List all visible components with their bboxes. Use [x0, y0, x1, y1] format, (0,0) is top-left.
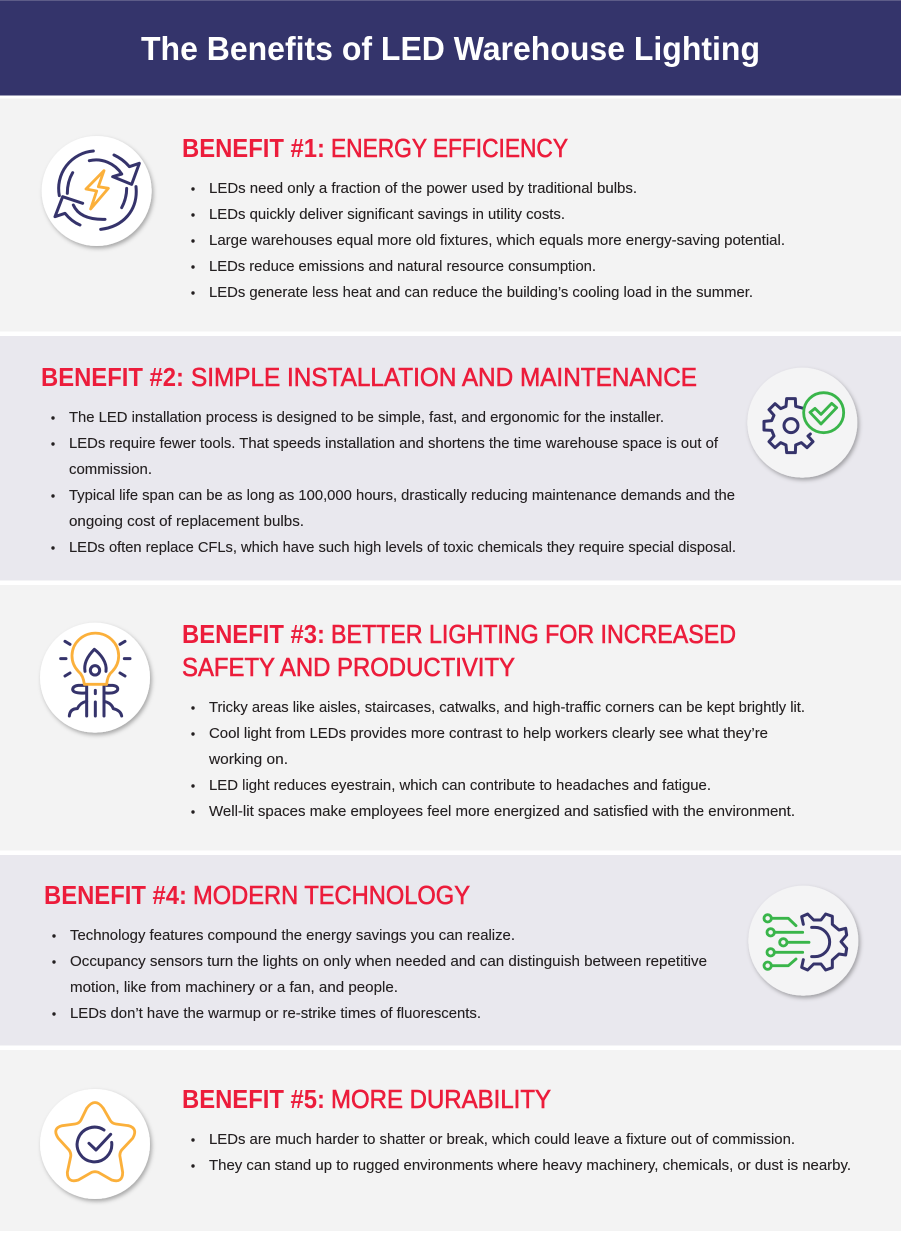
bullet list: benefit 3: LED light reduces eyestrain, which can contribute to headaches and fatigue.: [209, 778, 711, 794]
heading: benefit 3: [182, 619, 736, 682]
heading: benefit 5: MORE DURABILITY: [331, 1084, 551, 1114]
panel: benefit 1 energy efficiency: [0, 98, 901, 332]
bullet list: benefit 4: Occupancy sensors turn the lights on only when needed and can distinguish between repetitive: [70, 954, 707, 970]
icon: energy cycle with lightning bolt: [42, 136, 152, 246]
heading: benefit 5: [182, 1084, 551, 1114]
heading: benefit 3: SAFETY AND PRODUCTIVITY: [182, 652, 515, 682]
bullet list: benefit 1: LEDs reduce emissions and natural resource consumption.: [209, 259, 596, 275]
heading: benefit 4: [44, 880, 470, 910]
bullet list: benefit 3: [191, 700, 805, 820]
icon: light bulb with rocket: [40, 623, 150, 733]
bullet list: benefit 4: Technology features compound the energy savings you can realize.: [70, 928, 515, 944]
bullet list: benefit 2: ongoing cost of replacement bulbs.: [69, 514, 304, 530]
heading: benefit 1: ENERGY EFFICIENCY: [331, 133, 568, 163]
bullet list: benefit 3: working on.: [208, 752, 288, 768]
panel: benefit 5 more durability: [0, 1050, 901, 1231]
icon: circuit gear: [748, 886, 858, 996]
bullet list: benefit 3: Well-lit spaces make employees feel more energized and satisfied with the environment.: [209, 804, 795, 820]
title: The Benefits of LED Warehouse Lighting: [141, 30, 760, 67]
heading: benefit 4: BENEFIT #4:: [44, 880, 187, 910]
header banner: [0, 0, 901, 96]
panel: benefit 2 simple installation and maintenance: [0, 336, 901, 580]
bullet list: benefit 1: Large warehouses equal more old fixtures, which equals more energy-saving potential.: [209, 233, 785, 249]
icon: gear with check mark: [747, 368, 857, 478]
bullet list: benefit 1: [191, 181, 785, 301]
bullet list: benefit 2: Typical life span can be as long as 100,000 hours, drastically reducing maintenance demands and the: [69, 488, 735, 504]
bullet list: benefit 2: The LED installation process is designed to be simple, fast, and ergonomic for the installer.: [69, 410, 664, 426]
heading: benefit 3: BETTER LIGHTING FOR INCREASED: [331, 619, 736, 649]
bullet list: benefit 5: [191, 1132, 851, 1174]
bullet list: benefit 3: Tricky areas like aisles, staircases, catwalks, and high-traffic corners can be kept brightly lit.: [209, 700, 805, 716]
bullet list: benefit 1: LEDs generate less heat and can reduce the building’s cooling load in the summer.: [209, 285, 753, 301]
bullet list: benefit 4: motion, like from machinery or a fan, and people.: [70, 980, 398, 996]
heading: benefit 1: [182, 133, 568, 163]
bullet list: benefit 5: LEDs are much harder to shatter or break, which could leave a fixture out of commission.: [209, 1132, 795, 1148]
bullet list: benefit 4: [52, 928, 707, 1022]
bullet list: benefit 3: Cool light from LEDs provides more contrast to help workers clearly see what they’re: [209, 726, 768, 742]
panel: benefit 3 better lighting: [0, 585, 901, 850]
panel: benefit 4 modern technology: [0, 855, 901, 1046]
heading: benefit 4: MODERN TECHNOLOGY: [193, 880, 470, 910]
heading: benefit 1: BENEFIT #1:: [182, 133, 325, 163]
heading: benefit 2: BENEFIT #2:: [41, 362, 184, 392]
bullet list: benefit 5: They can stand up to rugged environments where heavy machinery, chemicals, or dust is nearby.: [209, 1158, 851, 1174]
heading: benefit 3: BENEFIT #3:: [182, 619, 325, 649]
bullet list: benefit 2: [51, 410, 736, 556]
bullet list: benefit 4: LEDs don’t have the warmup or re-strike times of fluorescents.: [70, 1006, 481, 1022]
bullet list: benefit 1: LEDs need only a fraction of the power used by traditional bulbs.: [209, 181, 637, 197]
bullet list: benefit 1: LEDs quickly deliver significant savings in utility costs.: [209, 207, 565, 223]
heading: benefit 5: BENEFIT #5:: [182, 1084, 325, 1114]
icon: star with check mark: [40, 1089, 150, 1199]
bullet list: benefit 2: commission.: [69, 462, 152, 478]
bullet list: benefit 2: LEDs require fewer tools. That speeds installation and shortens the time warehouse space is out of: [69, 436, 719, 452]
heading: benefit 2: SIMPLE INSTALLATION AND MAINTENANCE: [191, 362, 697, 392]
bullet list: benefit 2: LEDs often replace CFLs, which have such high levels of toxic chemicals they require special disposal.: [69, 540, 736, 556]
